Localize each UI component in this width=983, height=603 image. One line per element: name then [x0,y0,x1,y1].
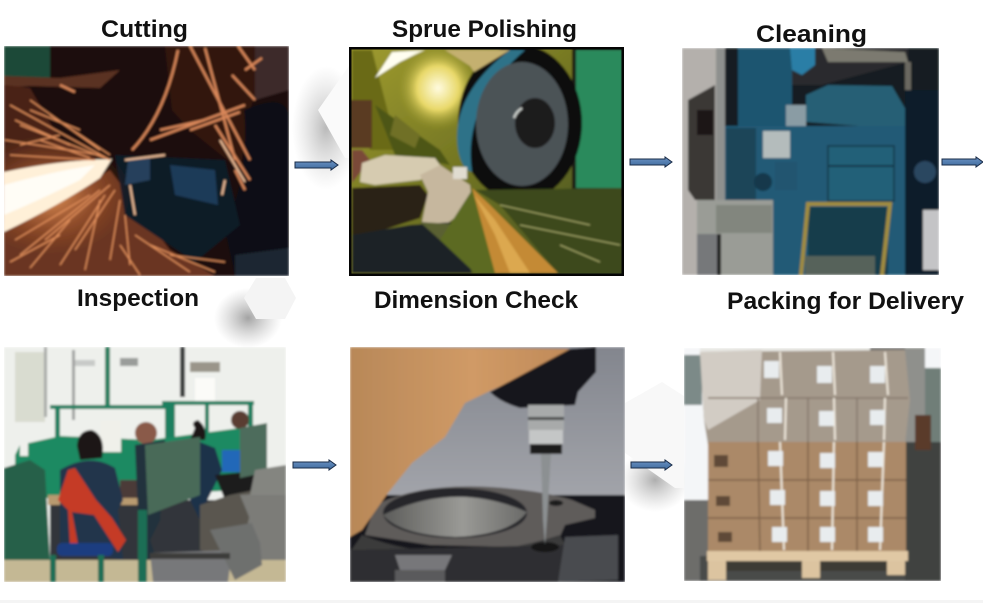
photo: inspection [4,347,286,582]
photo: cleaning [682,48,939,275]
arrow: cutting to sprue polishing [295,160,338,170]
photo: cutting [0,46,289,276]
decorative hexagon: top [292,66,360,190]
heading: Packing for Delivery: Packing for Delivery [727,288,965,315]
arrow: cleaning to next step [942,157,983,167]
decorative hexagon: bottom [619,382,691,512]
arrow: sprue polishing to cleaning [630,157,672,167]
photo: packing [684,348,941,581]
heading: Cleaning: Cleaning [756,21,867,48]
arrow: dimension check to packing [631,460,672,470]
decorative hexagon: middle [214,278,296,348]
heading: Inspection: Inspection [77,285,199,312]
photo: dimension check [350,347,625,582]
arrow: inspection to dimension check [293,460,336,470]
heading: Dimension Check: Dimension Check [374,287,579,314]
photo: sprue polishing [349,44,624,276]
heading: Cutting: Cutting [101,16,188,43]
heading: Sprue Polishing: Sprue Polishing [392,16,577,43]
